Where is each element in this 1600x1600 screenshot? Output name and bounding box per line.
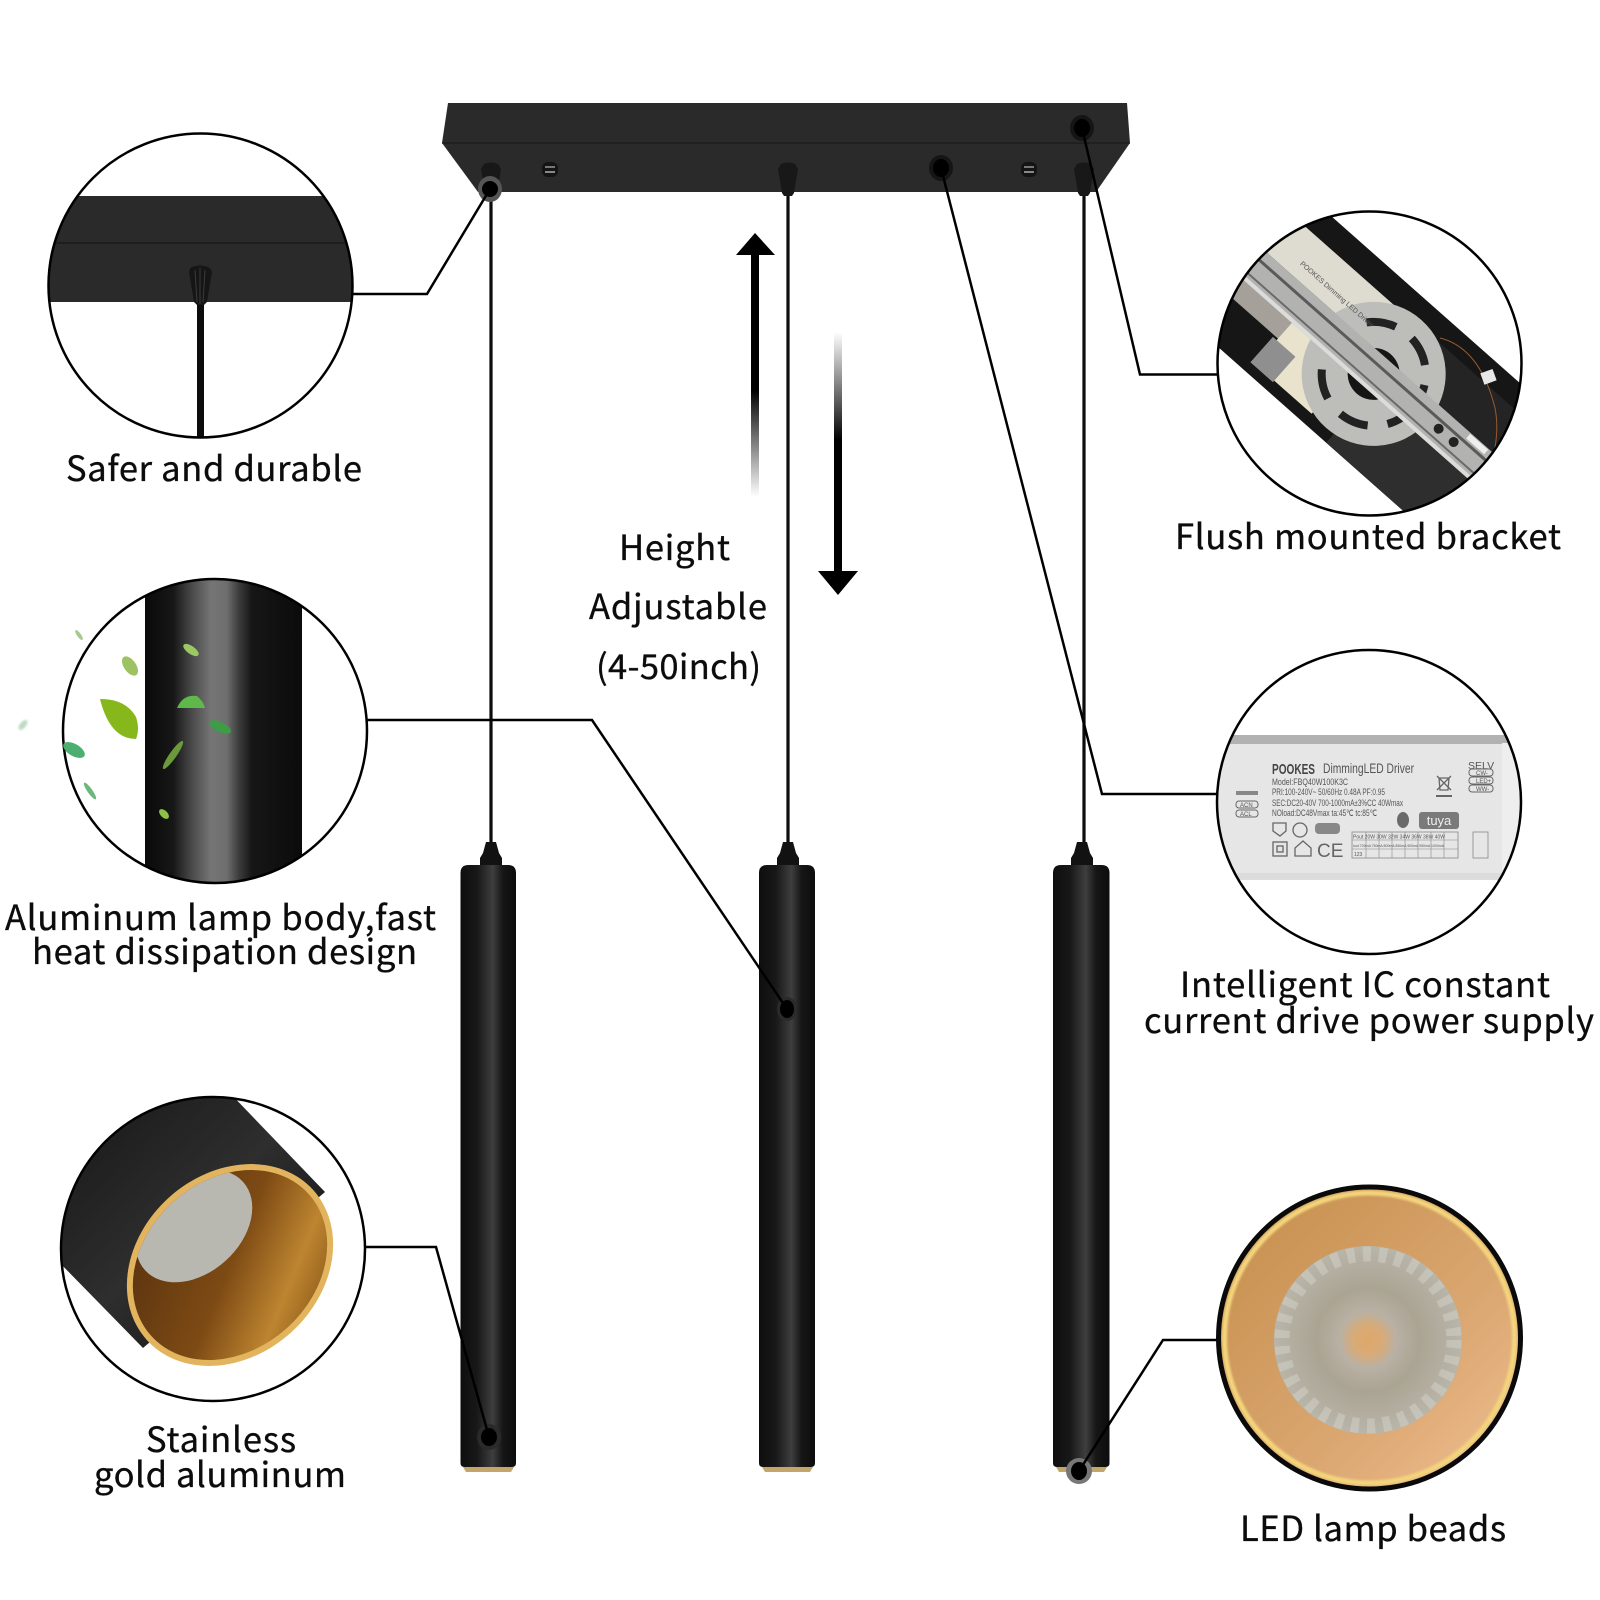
callout circle: canopy detail <box>40 134 370 443</box>
caption: LED lamp beads: LED lamp beads <box>1240 1501 1506 1551</box>
leader line: aluminum body <box>367 720 797 1021</box>
caption: stainless gold aluminum: Stainless <box>146 1412 296 1462</box>
arrow: up <box>736 233 775 497</box>
driver label text: DimmingLED Driver <box>1323 760 1414 776</box>
driver label text: ACL <box>1240 812 1252 818</box>
ceiling canopy <box>442 103 1130 192</box>
pendant lamp right <box>1053 162 1110 1472</box>
caption: safer and durable: Safer and durable <box>66 441 362 491</box>
spec table: Pout 20W 30W 32W 34W 36W 38W 40W <box>1353 834 1445 840</box>
caption: height adjustable: Adjustable <box>589 579 767 629</box>
driver label text <box>1240 760 1494 818</box>
leaves outside tube <box>17 629 141 732</box>
caption: height adjustable: Height <box>619 520 730 570</box>
caption: aluminum lamp body <box>5 890 436 974</box>
caption: intelligent IC drive <box>1144 957 1594 1043</box>
spec table <box>1352 832 1488 858</box>
caption: intelligent IC drive: current drive power supply <box>1144 993 1594 1043</box>
tuya badge <box>1397 812 1459 829</box>
caption: stainless gold aluminum <box>94 1412 346 1497</box>
terminal boxes <box>1236 769 1493 817</box>
caption: aluminum lamp body: heat dissipation design <box>32 924 417 974</box>
caption: intelligent IC drive: Intelligent IC constant <box>1180 957 1550 1007</box>
callout circle: flush mounted bracket <box>1216 210 1523 517</box>
driver label text: SELV <box>1468 760 1494 772</box>
leader line: driver <box>929 155 1217 794</box>
leader line: LED beads <box>1066 1340 1217 1484</box>
spec table: 123 <box>1354 852 1363 858</box>
caption: height adjustable <box>589 520 767 689</box>
callout circle: flush mounted bracket: POOKES Dimming LED Driver <box>1298 261 1375 329</box>
leader line: stainless gold aluminum <box>365 1247 501 1450</box>
caption: height adjustable: (4-50inch) <box>596 639 761 689</box>
callout circle: aluminum tube with leaves <box>61 570 367 890</box>
driver label text: PRI:100-240V~ 50/60Hz 0.48A PF:0.95 <box>1272 787 1385 797</box>
callout circle: LED lamp beads <box>1218 1186 1522 1490</box>
certification marks <box>1273 776 1452 856</box>
arrow: down <box>818 332 858 595</box>
callout circle: stainless gold aluminum <box>55 1090 374 1408</box>
leader line: bracket <box>1070 115 1217 374</box>
callout circle: LED driver label <box>1210 650 1532 954</box>
driver label text: WW- <box>1476 787 1489 793</box>
driver label text: ACN <box>1240 803 1253 809</box>
leader line: safer and durable <box>353 176 502 294</box>
caption: flush mounted bracket: Flush mounted bracket <box>1175 509 1561 559</box>
driver label text: NOload:DC48Vmax ta:45℃ tc:85℃ <box>1272 808 1377 818</box>
driver label text: SEC:DC20-40V 700-1000mA±3%CC 40Wmax <box>1272 798 1403 808</box>
caption: stainless gold aluminum: gold aluminum <box>94 1447 346 1497</box>
driver label text: POOKES <box>1272 761 1315 778</box>
driver label text: LED+ <box>1476 779 1492 785</box>
tuya badge: tuya <box>1427 813 1452 828</box>
spec table: Iout 700mA 750mA 800mA 850mA 900mA 950mA 1000mA <box>1353 844 1445 848</box>
driver label text: CW- <box>1476 771 1488 777</box>
pendant lamp left <box>460 162 516 1472</box>
driver label text: Model:FBQ40W100K3C <box>1272 777 1348 787</box>
caption: aluminum lamp body: Aluminum lamp body,fast <box>5 890 436 940</box>
callout circle: LED driver label: CE <box>1317 841 1343 862</box>
pendant lamp centre <box>759 162 815 1472</box>
